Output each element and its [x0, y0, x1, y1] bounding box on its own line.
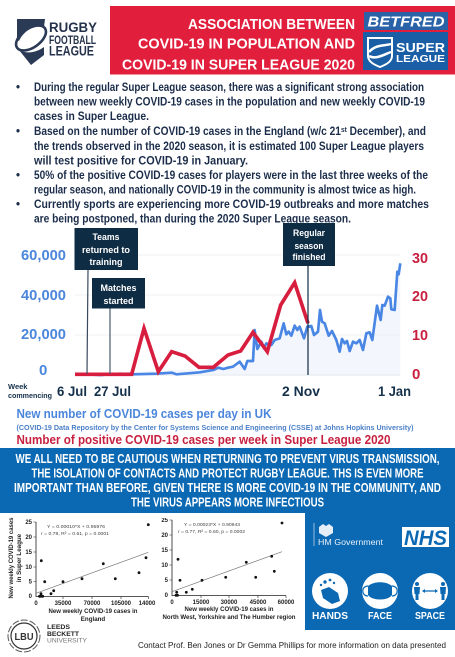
logo: Betfred Super League: LEAGUE: [396, 54, 445, 65]
scatter plot: England: England: [81, 616, 105, 623]
logo: HM Government: HM Government: [318, 538, 384, 547]
logo: Leeds Beckett University: UNIVERSITY: [47, 638, 88, 644]
x axis labels: Week: [8, 382, 28, 391]
icon: face: FACE: [368, 611, 392, 622]
logo: Betfred Super League: [363, 12, 448, 70]
Super League weekly cases line: [75, 283, 308, 374]
scatter plot: England: 0: [29, 594, 33, 600]
bullet text block: will test positive for COVID-19 in January.: [33, 156, 248, 168]
scatter plot: North West, Yorkshire and Humber: 5: [165, 578, 169, 584]
callout: regular season finished: finished: [292, 252, 326, 262]
scatter plot: North West, Yorkshire and Humber: [161, 518, 296, 621]
left axis labels: [21, 247, 66, 379]
scatter plot: North West, Yorkshire and Humber: 15000: [193, 600, 210, 606]
left axis labels: 20,000: [21, 326, 66, 343]
UK daily cases area and line: [75, 263, 400, 375]
scatter plot: England: Y = 0.00010*X + 0.95976: [47, 524, 106, 529]
scatter plot: North West, Yorkshire and Humber: 20: [161, 533, 169, 539]
logo: Rugby Football League: FOOTBALL: [49, 35, 96, 47]
logo: Rugby Football League: [12, 19, 97, 65]
bullet text block: cases in Super League.: [34, 111, 149, 123]
icon: space: [412, 573, 448, 622]
callout: regular season finished: Regular: [293, 228, 325, 238]
right axis labels: 20: [412, 288, 428, 305]
icon: hands: HANDS: [312, 611, 348, 622]
left axis labels: 0: [39, 362, 47, 379]
logo: Leeds Beckett University: [8, 620, 88, 652]
scatter plot: England: r = 0.78, R² = 0.61, p = 0.0001: [41, 531, 110, 536]
chart legend: Number of positive COVID-19 cases per week in Super League 2020: [16, 432, 390, 447]
scatter plot: England: 70000: [84, 601, 101, 607]
logo: HM Government: [314, 523, 384, 547]
x axis labels: 6 Jul: [57, 384, 87, 399]
callout: teams returned to training: training: [90, 257, 122, 267]
icon: hands: [312, 573, 348, 622]
scatter plot: North West, Yorkshire and Humber: 45000: [250, 600, 267, 606]
scatter plot: England: in Super League: [16, 533, 23, 582]
logo: Betfred Super League: SUPER: [396, 41, 445, 55]
logo: Betfred Super League: BETFRED: [368, 14, 445, 30]
icon: face: [362, 573, 398, 622]
scatter plot: England: 0: [34, 601, 38, 607]
blue message banner: [0, 448, 455, 513]
chart legend: [16, 406, 414, 447]
bullet text block: •: [16, 126, 20, 138]
logo: Leeds Beckett University: LEEDS: [47, 624, 71, 631]
scatter plot: England: New weekly COVID-19 cases in: [48, 608, 138, 615]
x axis labels: 2 Nov: [282, 384, 321, 399]
right axis labels: 0: [412, 366, 420, 383]
icon: space: SPACE: [415, 611, 445, 622]
scatter plot: North West, Yorkshire and Humber: 25: [161, 518, 169, 524]
bullet text block: [16, 82, 429, 226]
scatter plot: England: 10: [25, 565, 33, 571]
scatter plot: England: 35000: [55, 601, 72, 607]
bullet text block: st: [341, 125, 347, 134]
logo: Leeds Beckett University: LBU: [14, 632, 34, 643]
scatter plot: England: 20: [25, 535, 33, 541]
left axis labels: 60,000: [21, 247, 66, 264]
scatter plot: England: 5: [29, 580, 33, 586]
x axis labels: [8, 382, 411, 400]
logo: Leeds Beckett University: BECKETT: [47, 631, 79, 638]
bullet text block: Based on the number of COVID-19 cases in the England (w/c 21: [34, 126, 381, 138]
callout: regular season finished: season: [294, 241, 324, 251]
chart legend: New number of COVID-19 cases per day in UK: [16, 406, 272, 421]
callout: matches started: Matches: [100, 283, 136, 293]
scatter plot: North West, Yorkshire and Humber: 10: [161, 563, 169, 569]
x axis labels: 1 Jan: [378, 384, 411, 399]
right axis labels: 10: [412, 327, 428, 344]
title: [122, 16, 355, 74]
scatter plot: North West, Yorkshire and Humber: r = 0.77, R² = 0.60, p = 0.0002: [178, 529, 246, 534]
callout: teams returned to training: [74, 228, 138, 374]
scatter plot: North West, Yorkshire and Humber: Y = 0.00023*X + 0.90943: [184, 522, 241, 527]
chart legend: (COVID-19 Data Repository by the Center for Systems Science and Engineering (CSSE) at Johns Hopkins University): [16, 425, 414, 432]
logo: NHS: NHS: [404, 527, 447, 550]
header banner: [110, 6, 455, 74]
callout: teams returned to training: Teams: [92, 232, 120, 242]
left axis labels: 40,000: [21, 287, 66, 304]
x axis labels: commencing: [8, 391, 52, 400]
title: ASSOCIATION BETWEEN: [188, 16, 355, 33]
bullet text block: •: [16, 199, 20, 211]
scatter plot: North West, Yorkshire and Humber: 60000: [278, 600, 295, 606]
panel: government guidance: [305, 511, 455, 630]
logo: Rugby Football League: LEAGUE: [49, 44, 94, 58]
scatter plot: North West, Yorkshire and Humber: 30000: [221, 600, 238, 606]
line chart: COVID-19 cases: [8, 223, 428, 400]
scatter plot: England: New weekly COVID-19 cases: [8, 517, 15, 598]
logo: Rugby Football League: RUGBY: [49, 20, 97, 35]
right axis labels: 30: [412, 250, 428, 267]
right axis labels: [412, 250, 428, 383]
scatter plot: England: 15: [25, 550, 33, 556]
bullet text block: are being postponed, than during the 2020 Super League season.: [34, 214, 351, 226]
scatter plot: England: 25: [25, 520, 33, 526]
scatter plot: North West, Yorkshire and Humber: North West, Yorkshire and The Humber region: [162, 614, 296, 621]
blue message banner: THE VIRUS APPEARS MORE INFECTIOUS: [131, 496, 324, 510]
scatter plot: England: 14000: [139, 601, 156, 607]
scatter plot: North West, Yorkshire and Humber: 0: [170, 600, 174, 606]
scatter plot: North West, Yorkshire and Humber: 0: [165, 593, 169, 599]
scatter plot: England: 105000: [111, 601, 132, 607]
scatter plot: North West, Yorkshire and Humber: New weekly COVID-19 cases in: [184, 606, 274, 613]
scatter plot: North West, Yorkshire and Humber: 15: [161, 548, 169, 554]
callout: regular season finished: [283, 223, 335, 375]
callout: teams returned to training: returned to: [82, 245, 130, 255]
contact line: Contact Prof. Ben Jones or Dr Gemma Phillips for more information on data presented: [138, 641, 446, 650]
x axis labels: 27 Jul: [94, 384, 131, 399]
bullet text block: •: [16, 82, 20, 94]
callout: matches started: started: [104, 296, 134, 306]
bullet text block: •: [16, 170, 20, 182]
title: COVID-19 IN SUPER LEAGUE 2020: [122, 56, 355, 74]
title: COVID-19 IN POPULATION AND: [138, 36, 355, 52]
callout: matches started: [92, 278, 145, 374]
scatter plot: England: [8, 517, 156, 623]
bullet text block: December), and: [347, 126, 426, 138]
